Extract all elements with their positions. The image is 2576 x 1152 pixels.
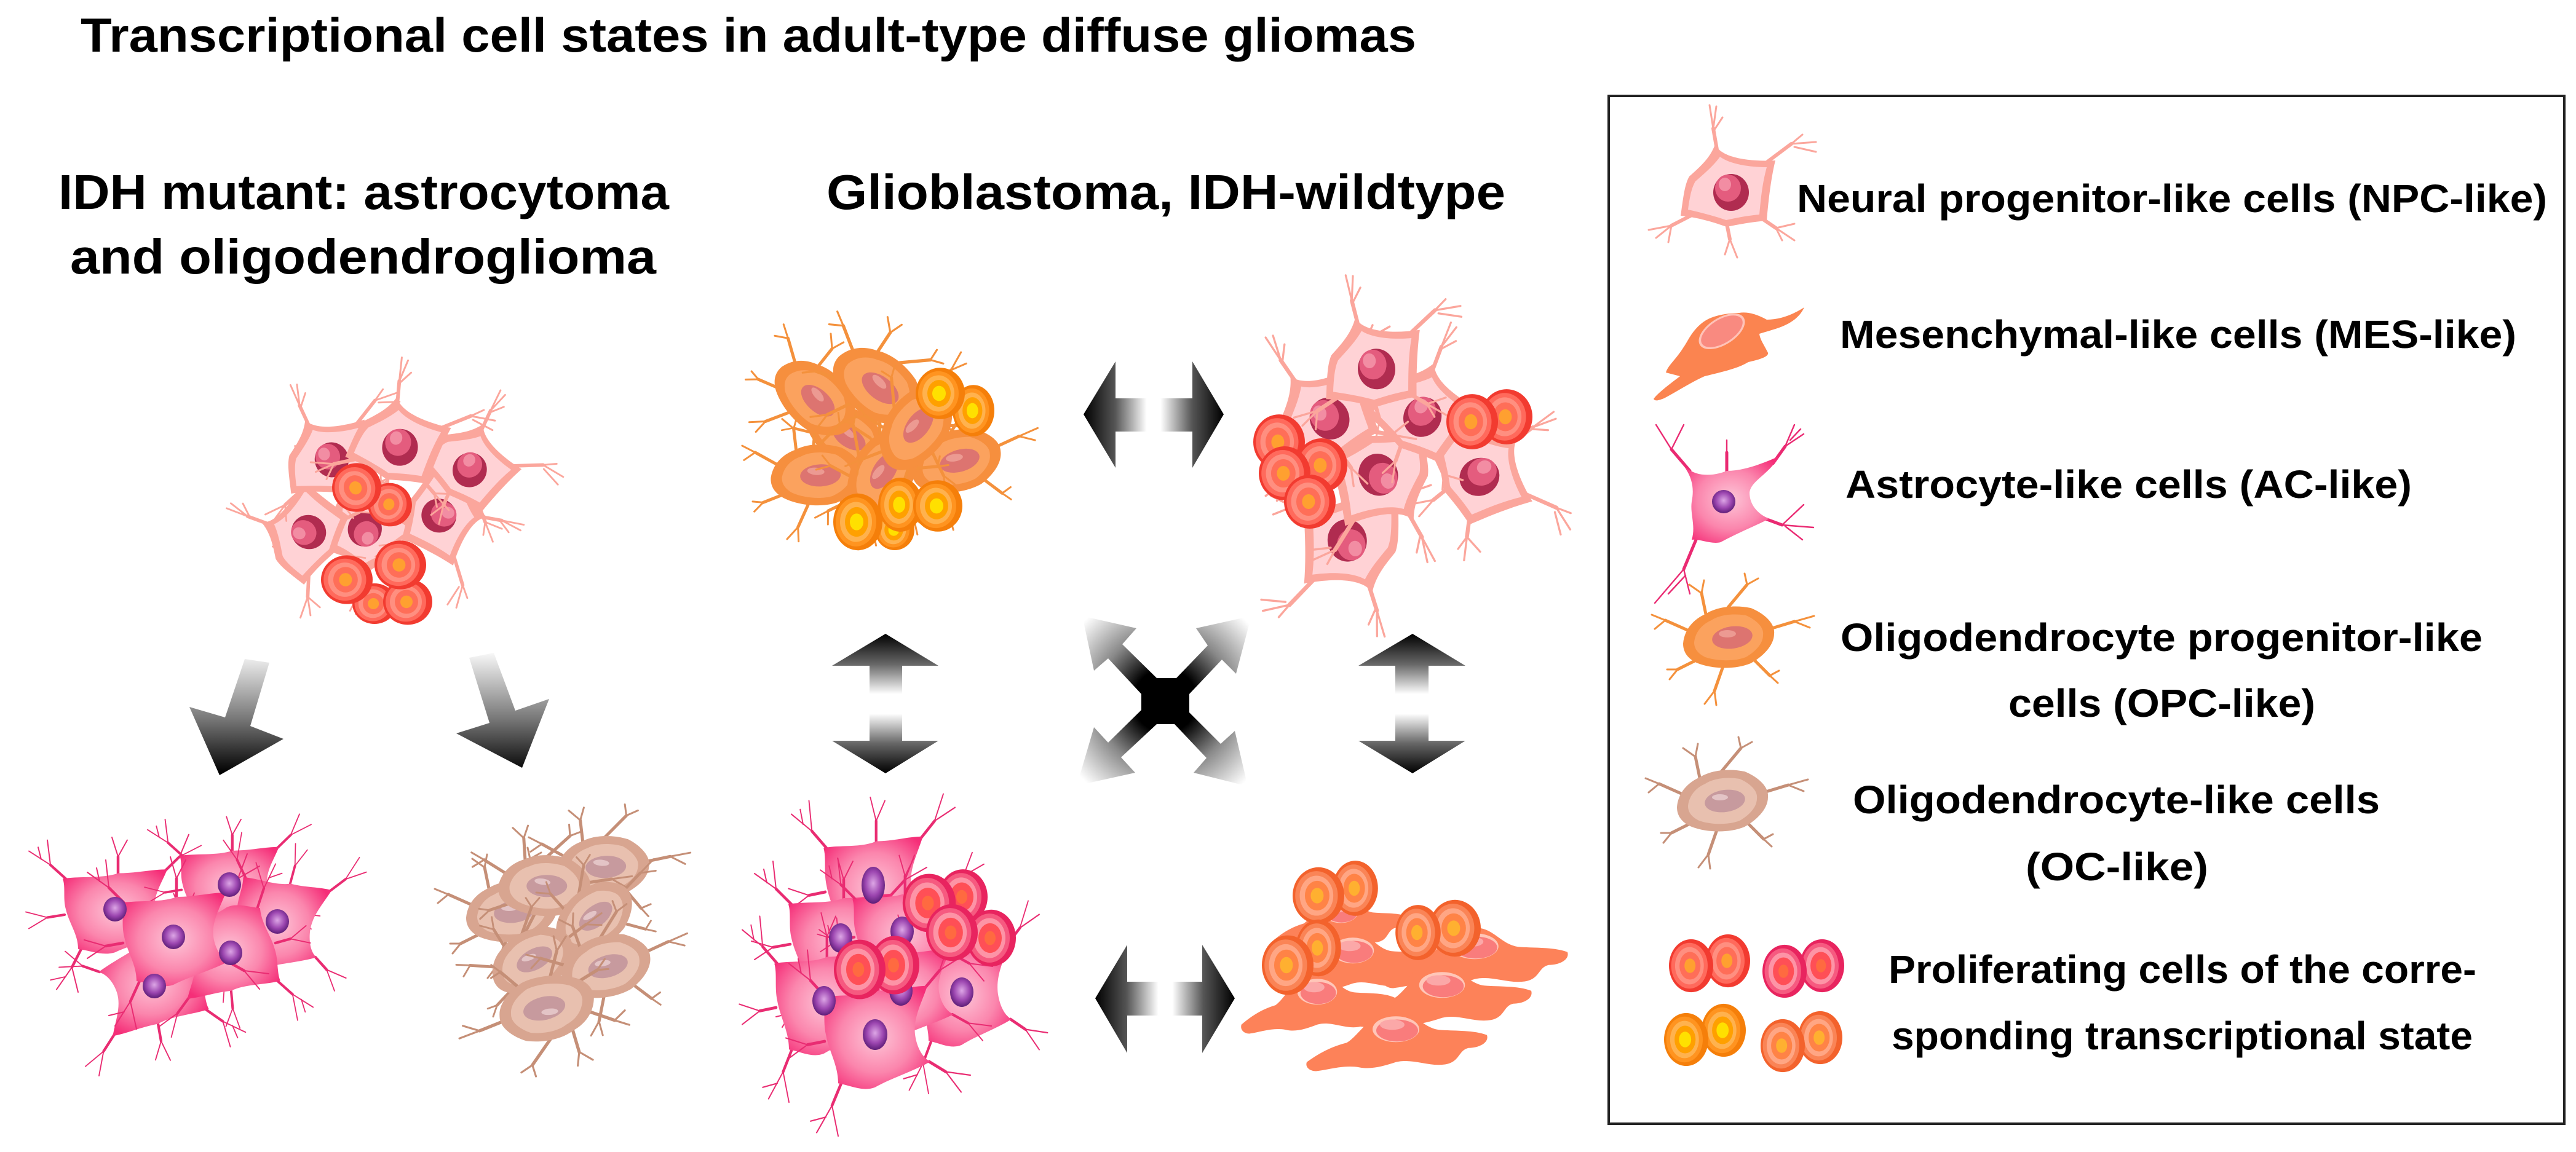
arrow: NPC and MES vertical double arrow	[1358, 634, 1465, 773]
cluster: glioblastoma MES-like with proliferating cells	[1241, 861, 1568, 1071]
icon: OPC-like cell	[1652, 574, 1814, 705]
title: Transcriptional cell states in adult-type diffuse gliomas	[81, 8, 1416, 62]
legend label: OC-like: (OC-like)	[2026, 845, 2208, 889]
cluster: glioblastoma NPC-like with proliferating cells	[1205, 266, 1606, 653]
cluster: glioblastoma OPC-like with proliferating cells	[715, 281, 1050, 576]
legend label: OC-like	[1853, 778, 2380, 889]
arrow: OPC and AC vertical double arrow	[832, 634, 938, 773]
legend label: proliferating cells: Proliferating cells of the corre-	[1888, 947, 2476, 992]
legend label: OPC-like	[1841, 615, 2483, 725]
cluster: IDH mutant NPC-like with proliferating cells	[198, 342, 584, 634]
legend label: OPC-like: Oligodendrocyte progenitor-like	[1841, 615, 2483, 660]
legend label: NPC-like: Neural progenitor-like cells (NPC-like)	[1797, 176, 2547, 221]
legend label: AC-like: Astrocyte-like cells (AC-like)	[1845, 462, 2412, 507]
heading: glioblastoma: Glioblastoma, IDH-wildtype	[826, 165, 1505, 219]
heading: IDH mutant: IDH mutant: astrocytoma	[58, 165, 670, 219]
legend label: proliferating cells	[1888, 947, 2476, 1058]
arrow: central diagonal cross arrows	[1077, 616, 1251, 786]
legend label: proliferating cells: sponding transcriptional state	[1892, 1014, 2473, 1058]
arrow: NPC to astrocyte-like	[189, 659, 283, 775]
panel: legend	[1609, 96, 2564, 1124]
arrow: OPC and NPC horizontal double arrow	[1084, 361, 1224, 468]
heading: IDH mutant: and oligodendroglioma	[70, 229, 657, 284]
icon: AC-like cell	[1655, 425, 1813, 603]
icon: MES-like cell	[1654, 306, 1804, 400]
legend label: OPC-like: cells (OPC-like)	[2008, 681, 2315, 725]
heading: IDH mutant	[58, 165, 670, 284]
legend label: MES-like: Mesenchymal-like cells (MES-like)	[1840, 312, 2516, 357]
cluster: glioblastoma AC-like with proliferating cells	[739, 794, 1048, 1136]
legend label: OC-like: Oligodendrocyte-like cells	[1853, 778, 2380, 822]
cluster: IDH mutant AC-like	[26, 814, 377, 1079]
arrow: NPC to oligodendrocyte-like	[456, 653, 549, 768]
icon: NPC-like cell	[1649, 105, 1816, 258]
icon: proliferating cells	[1664, 934, 1844, 1072]
cluster: IDH mutant OC-like	[435, 796, 700, 1083]
arrow: AC and MES horizontal double arrow	[1095, 945, 1235, 1053]
icon: OC-like cell	[1646, 737, 1808, 869]
